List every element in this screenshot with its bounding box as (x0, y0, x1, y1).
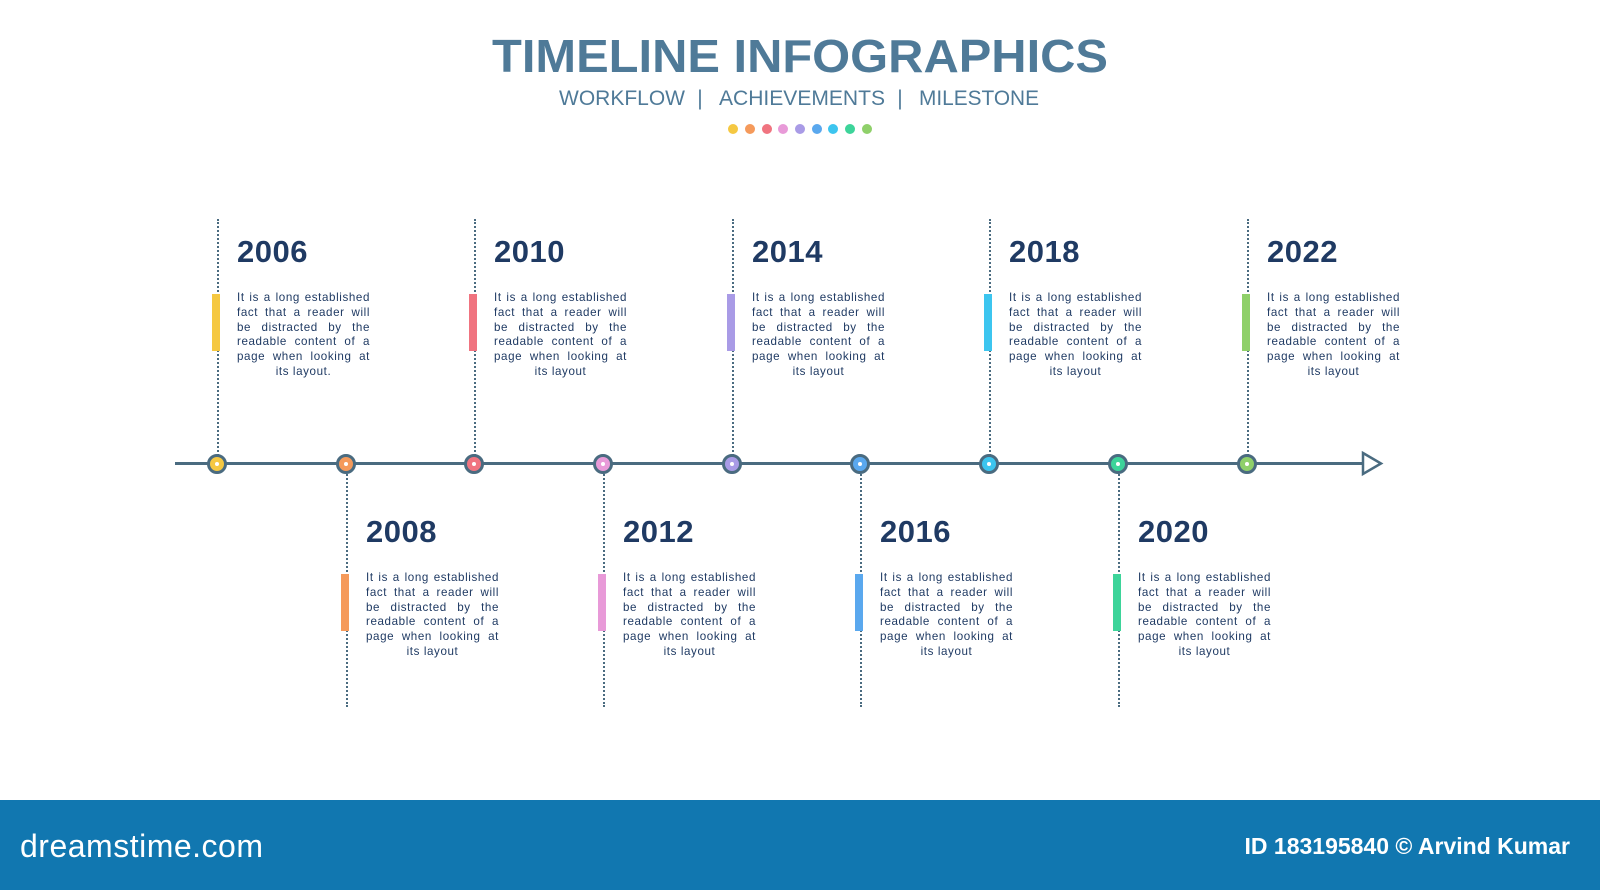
milestone 2022: its layout (1308, 365, 1359, 378)
title: | (697, 87, 703, 110)
milestone 2012: its layout (664, 645, 715, 658)
milestone 2006: 2006 (237, 234, 308, 269)
milestone 2018 (979, 219, 1142, 474)
milestone 2020: readable content of a (1138, 615, 1271, 628)
milestone 2018: 2018 (1009, 234, 1080, 269)
milestone 2014: page when looking at (752, 350, 885, 363)
milestone 2006 (207, 219, 370, 474)
milestone 2018: readable content of a (1009, 335, 1142, 348)
milestone 2006: page when looking at (237, 350, 370, 363)
milestone 2014: It is a long established (752, 291, 885, 304)
milestone 2016: 2016 (880, 514, 951, 549)
milestone 2016: It is a long established (880, 571, 1013, 584)
milestone 2006: be distracted by the (237, 321, 370, 334)
milestone 2022 (1237, 219, 1400, 474)
milestone 2012: page when looking at (623, 630, 756, 643)
milestone 2020: fact that a reader will (1138, 586, 1271, 599)
milestone 2020 (1108, 454, 1271, 707)
milestone 2022: readable content of a (1267, 335, 1400, 348)
footer banner (0, 800, 1600, 890)
milestone 2012: readable content of a (623, 615, 756, 628)
milestone 2012 (593, 454, 756, 707)
title: MILESTONE (919, 87, 1039, 110)
milestone 2010: 2010 (494, 234, 565, 269)
milestone 2018: its layout (1050, 365, 1101, 378)
milestone 2020: its layout (1179, 645, 1230, 658)
milestone 2006: readable content of a (237, 335, 370, 348)
title: | (897, 87, 903, 110)
milestone 2012: fact that a reader will (623, 586, 756, 599)
milestone 2016: fact that a reader will (880, 586, 1013, 599)
milestone 2010: It is a long established (494, 291, 627, 304)
milestone 2012: 2012 (623, 514, 694, 549)
milestone 2022: It is a long established (1267, 291, 1400, 304)
milestone 2010: page when looking at (494, 350, 627, 363)
milestone 2008 (336, 454, 499, 707)
milestone 2006: It is a long established (237, 291, 370, 304)
milestone 2016: page when looking at (880, 630, 1013, 643)
milestone 2010: readable content of a (494, 335, 627, 348)
milestone 2014: fact that a reader will (752, 306, 885, 319)
milestone 2016: be distracted by the (880, 601, 1013, 614)
title: TIMELINE INFOGRAPHICS (492, 30, 1108, 82)
milestone 2014: its layout (793, 365, 844, 378)
milestone 2014 (722, 219, 885, 474)
milestone 2008: fact that a reader will (366, 586, 499, 599)
milestone 2010 (464, 219, 627, 474)
milestone 2020: page when looking at (1138, 630, 1271, 643)
milestone 2016: its layout (921, 645, 972, 658)
milestone 2010: its layout (535, 365, 586, 378)
milestone 2018: be distracted by the (1009, 321, 1142, 334)
milestone 2018: It is a long established (1009, 291, 1142, 304)
milestone 2014: 2014 (752, 234, 823, 269)
milestone 2020: be distracted by the (1138, 601, 1271, 614)
milestone 2016: readable content of a (880, 615, 1013, 628)
timeline axis (175, 450, 1384, 476)
milestone 2022: 2022 (1267, 234, 1338, 269)
image id credit: ID 183195840 © Arvind Kumar (1245, 833, 1570, 859)
milestone 2006: fact that a reader will (237, 306, 370, 319)
milestone 2018: fact that a reader will (1009, 306, 1142, 319)
milestone 2008: 2008 (366, 514, 437, 549)
title: ACHIEVEMENTS (719, 87, 885, 110)
milestone 2022: fact that a reader will (1267, 306, 1400, 319)
milestone 2010: fact that a reader will (494, 306, 627, 319)
milestone 2006: its layout. (276, 365, 331, 378)
milestone 2018: page when looking at (1009, 350, 1142, 363)
milestone 2020: It is a long established (1138, 571, 1271, 584)
milestone 2008: its layout (407, 645, 458, 658)
milestone 2008: be distracted by the (366, 601, 499, 614)
milestone 2014: readable content of a (752, 335, 885, 348)
milestone 2012: be distracted by the (623, 601, 756, 614)
milestone 2012: It is a long established (623, 571, 756, 584)
milestone 2022: page when looking at (1267, 350, 1400, 363)
milestone 2014: be distracted by the (752, 321, 885, 334)
milestone 2008: readable content of a (366, 615, 499, 628)
milestone 2010: be distracted by the (494, 321, 627, 334)
milestone 2022: be distracted by the (1267, 321, 1400, 334)
milestone 2008: page when looking at (366, 630, 499, 643)
title (492, 30, 1108, 134)
milestone 2020: 2020 (1138, 514, 1209, 549)
brand logo text: dreamstime.com (20, 828, 264, 864)
title: WORKFLOW (559, 87, 685, 110)
milestone 2016 (850, 454, 1013, 707)
milestone 2008: It is a long established (366, 571, 499, 584)
